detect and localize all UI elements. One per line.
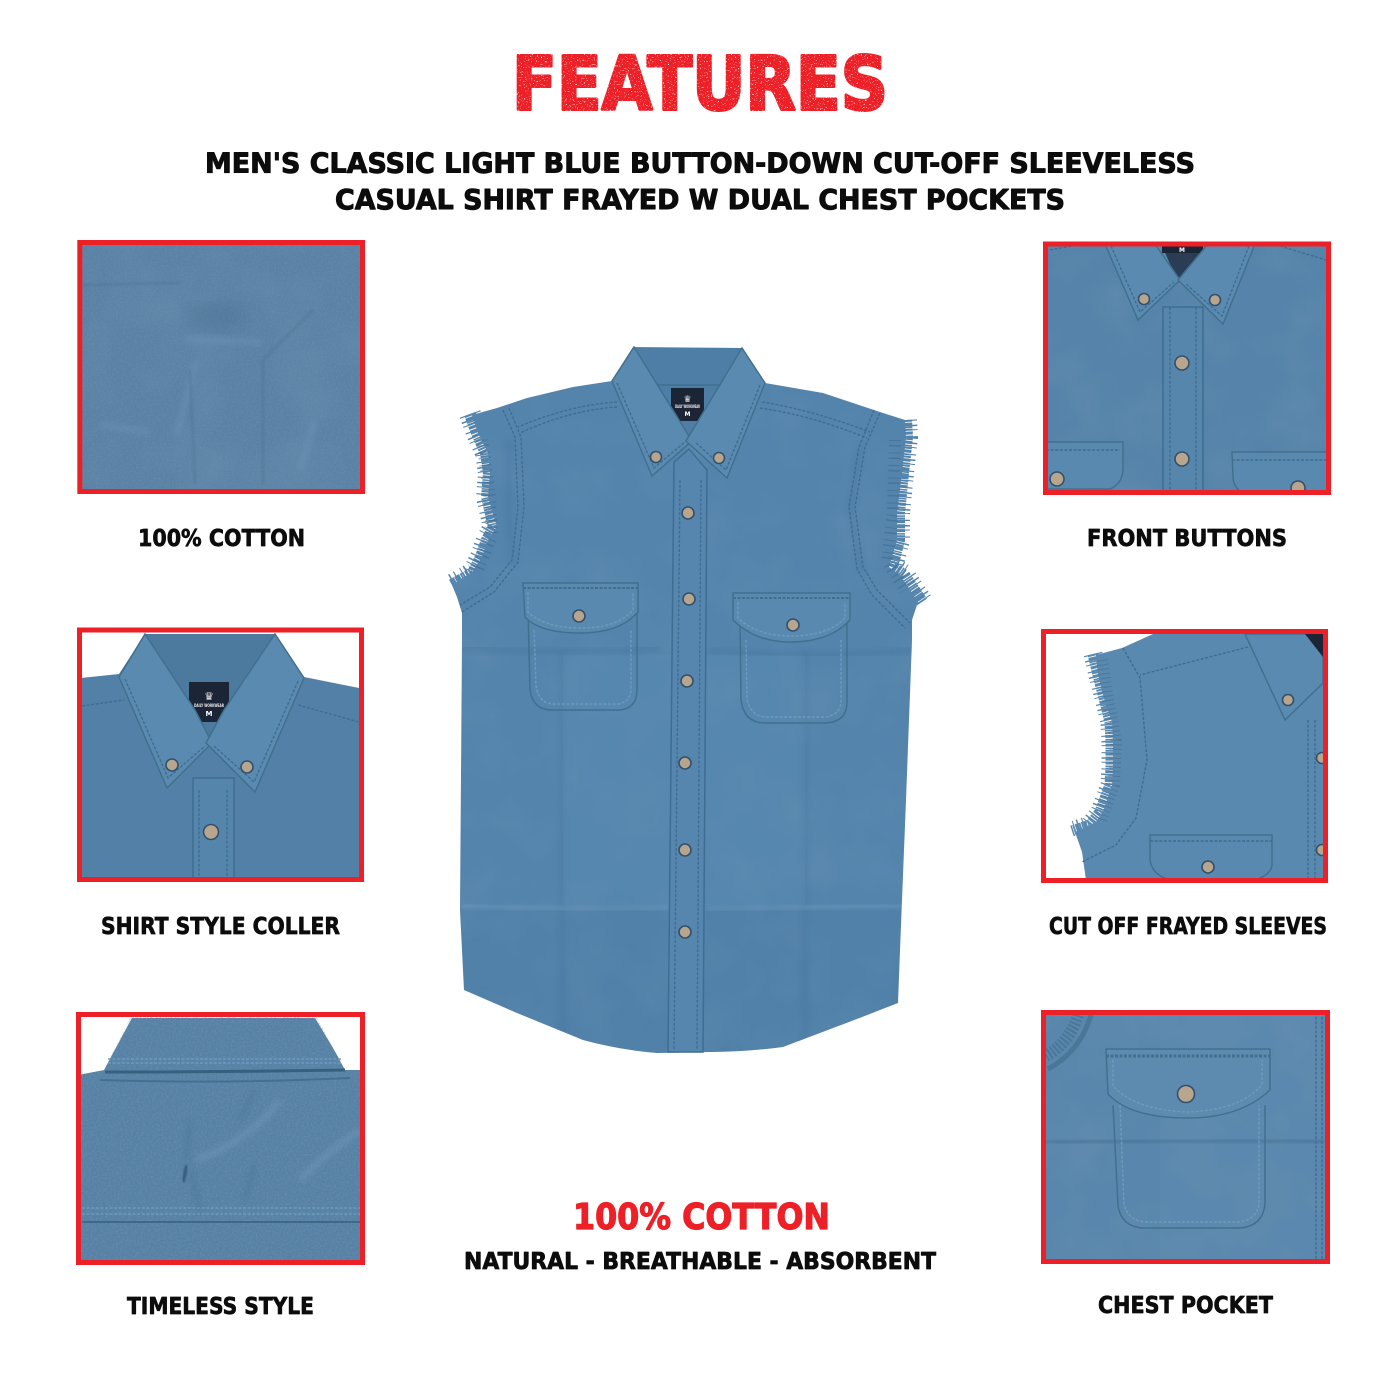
label: timeless style: TIMELESS STYLE: [127, 1294, 314, 1320]
neck tag: DAILY WORKWEAR: [194, 703, 224, 708]
neck tag: M: [685, 411, 691, 418]
right pocket: [733, 593, 850, 723]
frayed edge threads: [452, 414, 922, 602]
buttons: [573, 452, 799, 938]
panel: chest pocket: [1042, 1011, 1330, 1263]
dark threads in fray: [478, 440, 905, 590]
fabric shading: [460, 647, 912, 1050]
label: cut off frayed sleeves: CUT OFF FRAYED SLEEVES: [1049, 914, 1327, 940]
shirt illustration: [440, 340, 930, 1060]
neck tag: M: [206, 710, 213, 718]
placket: [668, 449, 707, 1052]
subtitle: MEN'S CLASSIC LIGHT BLUE BUTTON-DOWN CUT-OFF SLEEVELESS: [205, 146, 1195, 180]
armhole and shoulder stitching: [460, 402, 910, 628]
shirt body: [452, 347, 918, 1053]
neck tag: DAILY WORKWEAR: [675, 404, 700, 409]
panel: cut off frayed sleeves: [1041, 630, 1328, 882]
panel: 100% cotton fabric: [78, 241, 365, 494]
label: shirt style coller: SHIRT STYLE COLLER: [101, 914, 340, 940]
panel: timeless style: [77, 1012, 364, 1265]
label: front buttons: FRONT BUTTONS: [1087, 526, 1287, 552]
panel: front buttons: [1044, 242, 1331, 495]
label: 100% cotton: 100% COTTON: [138, 526, 305, 552]
neck tag: ♛: [683, 395, 692, 405]
subtitle: CASUAL SHIRT FRAYED W DUAL CHEST POCKETS: [335, 183, 1065, 216]
neck tag: [189, 682, 229, 722]
subtitle: [205, 146, 1195, 216]
title: FEATURES: [512, 42, 888, 128]
callout: natural, breathable, absorbent: NATURAL - BREATHABLE - ABSORBENT: [464, 1249, 936, 1275]
label: chest pocket: CHEST POCKET: [1098, 1293, 1273, 1319]
collar: [612, 347, 765, 478]
neck tag: ♛: [204, 690, 214, 703]
callout: 100% cotton: 100% COTTON: [573, 1197, 830, 1238]
neck tag: [671, 388, 704, 421]
panel: shirt style collar: [77, 629, 364, 881]
left pocket: [523, 583, 638, 710]
panel: front buttons: M: [1179, 247, 1185, 254]
